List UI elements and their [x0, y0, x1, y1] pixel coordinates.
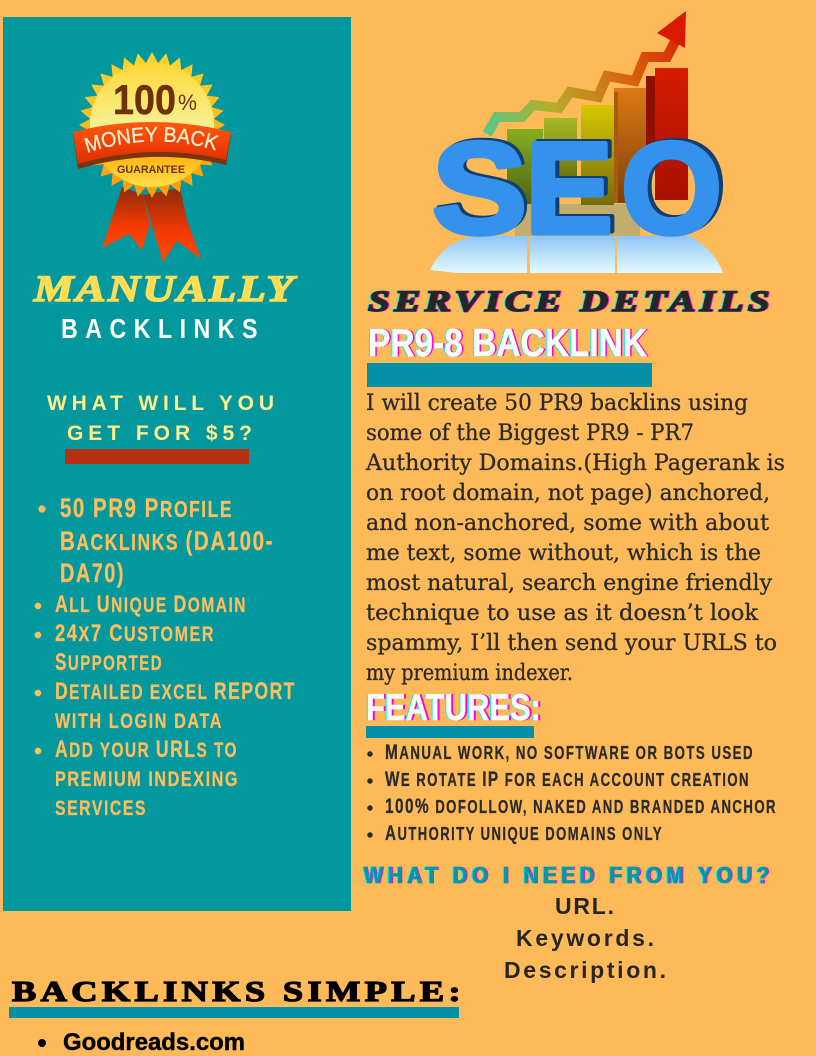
list: what you get: PREMIUM INDEXING — [55, 768, 239, 791]
text block: service description: some of the Biggest PR9 - PR7 — [366, 421, 694, 446]
bar chart — [507, 68, 688, 205]
SEO letters: S — [435, 113, 530, 259]
heading: manually: MANUALLY — [33, 269, 298, 310]
SEO letters — [432, 113, 726, 261]
SEO letters: E — [525, 115, 613, 261]
heading: what do I need from you: WHAT DO I NEED FROM YOU? — [362, 862, 772, 888]
icon: money back guarantee badge: % — [178, 90, 197, 115]
text block: service description: and non-anchored, some with about — [366, 511, 769, 536]
red underline bar — [65, 449, 249, 464]
heading: what will you get for $5 — [47, 392, 274, 445]
heading: features: FEATURES: — [368, 687, 543, 728]
text block: requirements: Description. — [504, 957, 666, 983]
list: what you get — [35, 493, 296, 820]
text block: requirements — [504, 893, 666, 983]
reflection — [430, 236, 723, 273]
teal bar under features — [366, 726, 534, 738]
text block: service description: most natural, search engine friendly — [366, 571, 773, 596]
panel: manually backlinks — [3, 17, 351, 911]
heading: what do I need from you: WHAT DO I NEED FROM YOU? — [364, 862, 774, 888]
list: what you get: BACKLINKS (DA100- — [60, 526, 274, 556]
list: what you get: DETAILED EXCEL REPORT — [55, 678, 296, 705]
badge text: 100%: 100 — [113, 76, 176, 123]
text block: service description: Authority Domains.(High Pagerank is — [365, 451, 785, 476]
text block: service description: me text, some without, which is the — [366, 541, 761, 566]
heading: PR9-8 backlink: PR9-8 BACKLINK — [368, 322, 647, 365]
teal bar under PR9-8 backlink — [367, 363, 652, 387]
text block: service description: I will create 50 PR9 backlins using — [366, 391, 748, 416]
text block: requirements: Keywords. — [516, 925, 654, 951]
heading: what do I need from you: WHAT DO I NEED FROM YOU? — [364, 862, 774, 888]
badge text: guarantee: GUARANTEE — [117, 164, 185, 176]
list: features: AUTHORITY UNIQUE DOMAINS ONLY — [385, 822, 663, 845]
list: what you get: DA70) — [60, 558, 125, 588]
list: what you get: 24X7 CUSTOMER — [55, 620, 215, 647]
list: what you get: 50 PR9 PROFILE — [60, 493, 233, 523]
SEO letters: E — [529, 113, 617, 259]
heading: features: FEATURES: — [365, 687, 540, 728]
SEO letters: O — [621, 115, 722, 261]
image: 3D SEO chart — [430, 11, 726, 273]
icon: money back guarantee badge — [73, 52, 231, 262]
list: what you get: ADD YOUR URLS TO — [55, 736, 238, 763]
list: what you get: SUPPORTED — [55, 649, 163, 676]
text block: service description — [365, 391, 785, 686]
list: backlinks simple: Goodreads.com — [63, 1029, 245, 1056]
heading: PR9-8 backlink: PR9-8 BACKLINK — [370, 322, 648, 365]
heading: features: FEATURES: — [366, 687, 541, 728]
heading: PR9-8 backlink: PR9-8 BACKLINK — [367, 322, 646, 365]
SEO letters: O — [625, 113, 726, 259]
text block: service description: on root domain, not page) anchored, — [366, 481, 770, 506]
SEO letters: S — [432, 115, 527, 261]
heading: service details: SERVICE DETAILS — [367, 285, 773, 318]
badge text: money back: MONEY BACK — [84, 126, 219, 153]
text block: service description: spammy, I’ll then send your URLS to — [366, 631, 777, 656]
list: what you get: SERVICES — [55, 797, 147, 820]
heading: what will you get for $5: WHAT WILL YOU — [47, 392, 274, 415]
teal bar under backlinks simple — [9, 1007, 459, 1018]
list: features — [367, 741, 777, 845]
heading: backlinks: BACKLINKS — [61, 313, 265, 344]
arrow — [487, 11, 686, 134]
text block: requirements: URL. — [555, 893, 614, 919]
text block: service description: technique to use as it doesn’t look — [366, 601, 759, 626]
heading: service details: SERVICE DETAILS — [369, 285, 775, 318]
heading: backlinks simple: BACKLINKS SIMPLE: — [12, 976, 465, 1008]
list: what you get: ALL UNIQUE DOMAIN — [55, 591, 247, 618]
text block: service description: my premium indexer. — [366, 661, 573, 686]
heading: what will you get for $5: GET FOR $5? — [67, 422, 252, 445]
list: what you get: WITH LOGIN DATA — [55, 710, 223, 733]
heading: service details: SERVICE DETAILS — [368, 285, 774, 318]
